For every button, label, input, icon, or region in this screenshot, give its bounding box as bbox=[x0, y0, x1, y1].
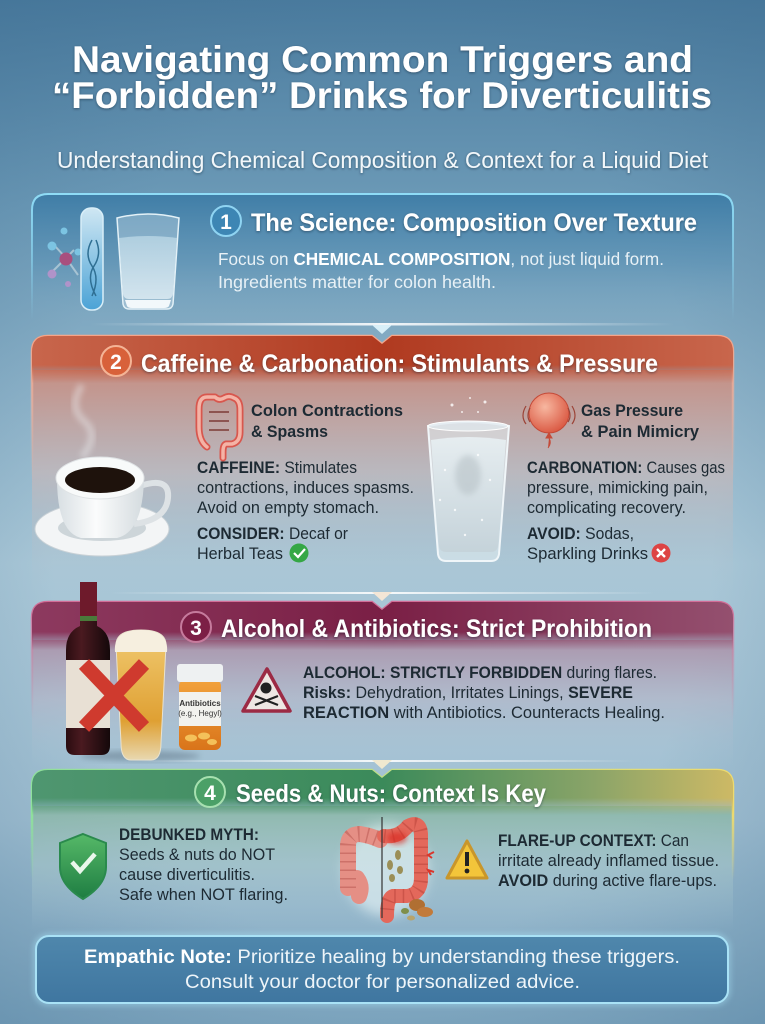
divider arrow 2 bbox=[110, 592, 655, 601]
icon: colon comparison with seeds bbox=[344, 817, 434, 920]
gas label bbox=[581, 401, 700, 441]
icon: caution triangle bbox=[447, 841, 487, 878]
colon label: & Spasms bbox=[251, 422, 328, 441]
body text bbox=[218, 249, 664, 292]
debunked text: Safe when NOT flaring. bbox=[119, 885, 288, 904]
icon: coffee cup bbox=[35, 385, 169, 556]
carbonation text bbox=[527, 458, 725, 563]
badge 3 bbox=[181, 612, 211, 642]
debunked text: DEBUNKED MYTH: bbox=[119, 825, 259, 844]
header band bbox=[32, 602, 733, 652]
gas label: & Pain Mimicry bbox=[581, 422, 700, 441]
caffeine text bbox=[197, 458, 414, 563]
heading: Alcohol & Antibiotics: Strict Prohibition bbox=[221, 615, 652, 643]
icon: balloon bbox=[523, 393, 575, 448]
note text: Consult your doctor for personalized advice. bbox=[185, 971, 580, 993]
alcohol text: Risks: Dehydration, Irritates Linings, SEVERE bbox=[303, 683, 633, 702]
flare-up text: AVOID during active flare-ups. bbox=[498, 871, 717, 890]
flare-up text: irritate already inflamed tissue. bbox=[498, 851, 719, 870]
carbonation text: complicating recovery. bbox=[527, 498, 686, 517]
title: Navigating Common Triggers and bbox=[72, 39, 693, 80]
icon: test tube and water glass bbox=[48, 208, 179, 310]
divider arrow 3 bbox=[130, 760, 635, 769]
heading: Seeds & Nuts: Context Is Key bbox=[236, 780, 546, 808]
heading: Caffeine & Carbonation: Stimulants & Pressure bbox=[141, 350, 658, 378]
icon: green check bbox=[290, 544, 308, 562]
carbonation text: Sparkling Drinks bbox=[527, 544, 648, 563]
colon label: Colon Contractions bbox=[251, 401, 403, 420]
badge 3: 3 bbox=[190, 617, 202, 640]
divider arrow 1 bbox=[90, 323, 675, 334]
caffeine text: Herbal Teas bbox=[197, 544, 283, 563]
badge 1 bbox=[211, 206, 241, 236]
carbonation text: AVOID: Sodas, bbox=[527, 524, 634, 543]
carbonation text: CARBONATION: Causes gas bbox=[527, 458, 725, 477]
icon: red x bbox=[652, 544, 670, 562]
debunked text: cause diverticulitis. bbox=[119, 865, 255, 884]
icon: antibiotics bottle bbox=[177, 664, 223, 750]
subtitle: Understanding Chemical Composition & Context for a Liquid Diet bbox=[57, 147, 709, 173]
caffeine text: contractions, induces spasms. bbox=[197, 478, 414, 497]
panel: the science bbox=[32, 194, 733, 322]
icon: colon bbox=[199, 396, 240, 458]
icon: antibiotics bottle: (e.g., Hegyl) bbox=[178, 709, 222, 718]
icon: wine, beer, crossed out bbox=[66, 582, 200, 761]
caffeine text: Avoid on empty stomach. bbox=[197, 498, 379, 517]
badge 4: 4 bbox=[204, 782, 216, 805]
flare-up text: FLARE-UP CONTEXT: Can bbox=[498, 831, 689, 850]
panel: empathic note bbox=[36, 936, 728, 1003]
body text: Ingredients matter for colon health. bbox=[218, 272, 496, 292]
panel: alcohol and antibiotics bbox=[32, 582, 733, 768]
icon: shield check bbox=[60, 834, 106, 899]
title bbox=[52, 39, 712, 116]
header band bbox=[32, 336, 733, 385]
alcohol text: REACTION with Antibiotics. Counteracts Healing. bbox=[303, 703, 665, 722]
flare-up text bbox=[498, 831, 719, 890]
badge 1: 1 bbox=[220, 211, 232, 234]
debunked text bbox=[119, 825, 288, 904]
icon: antibiotics bottle: Antibiotics bbox=[179, 699, 221, 708]
carbonation text: pressure, mimicking pain, bbox=[527, 478, 708, 497]
header band bbox=[32, 770, 733, 818]
caffeine text: CAFFEINE: Stimulates bbox=[197, 458, 357, 477]
gas label: Gas Pressure bbox=[581, 401, 683, 420]
badge 2: 2 bbox=[110, 351, 122, 374]
body text: Focus on CHEMICAL COMPOSITION, not just liquid form. bbox=[218, 249, 664, 269]
badge 2 bbox=[101, 346, 131, 376]
title: “Forbidden” Drinks for Diverticulitis bbox=[52, 75, 712, 116]
note text bbox=[84, 946, 680, 993]
colon label bbox=[251, 401, 403, 441]
caffeine text: CONSIDER: Decaf or bbox=[197, 524, 348, 543]
badge 4 bbox=[195, 777, 225, 807]
icon: skull warning bbox=[243, 669, 290, 711]
alcohol text bbox=[303, 663, 665, 722]
icon: sparkling glass bbox=[428, 397, 509, 561]
note text: Empathic Note: Prioritize healing by understanding these triggers. bbox=[84, 946, 680, 968]
panel: caffeine and carbonation bbox=[30, 334, 734, 562]
heading: The Science: Composition Over Texture bbox=[251, 209, 697, 237]
alcohol text: ALCOHOL: STRICTLY FORBIDDEN during flares. bbox=[303, 663, 657, 682]
debunked text: Seeds & nuts do NOT bbox=[119, 845, 275, 864]
panel: seeds and nuts bbox=[32, 770, 733, 930]
